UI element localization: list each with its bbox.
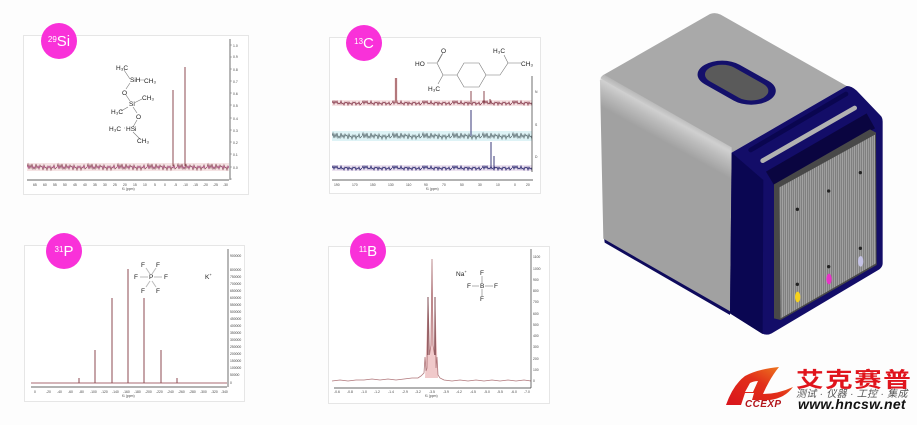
chart: 29Si NMR spectrum: 0.6 — [233, 92, 238, 96]
chart: 11B NMR spectrum: -1.4 — [388, 390, 394, 394]
tagline: 测试 · 仪器 · 工控 · 集成 — [796, 388, 909, 400]
badge: 29Si — [41, 23, 77, 59]
chart: 31P NMR spectrum: 450000 — [230, 317, 241, 321]
chart: 31P NMR spectrum: f1 (ppm) — [122, 394, 135, 398]
chart: 11B NMR spectrum: -0.6 — [334, 390, 340, 394]
chart: 31P NMR spectrum: -20 — [46, 390, 51, 394]
molecule: siloxane: O — [136, 114, 141, 121]
front left darker bevel — [730, 153, 763, 334]
molecule: siloxane: Si — [129, 101, 135, 108]
chart: 31P NMR spectrum: 100000 — [230, 366, 241, 370]
chart: 11B NMR spectrum: -7.0 — [524, 390, 530, 394]
chart: 11B NMR spectrum: 200 — [533, 357, 539, 361]
chart: 31P NMR spectrum: -100 — [90, 390, 97, 394]
chart: 11B NMR spectrum: -3.2 — [415, 390, 421, 394]
chart: 31P NMR spectrum: 900000 — [230, 254, 241, 258]
molecule: PF6: F — [141, 288, 145, 295]
chart: 31P NMR spectrum: -120 — [101, 390, 108, 394]
chart: 29Si NMR spectrum: -25 — [213, 183, 218, 187]
molecule: PF6: F — [156, 288, 160, 295]
chart: 31P NMR spectrum: 550000 — [230, 303, 241, 307]
chart: 29Si NMR spectrum: 25 — [113, 183, 117, 187]
chart: 31P NMR spectrum: -340 — [221, 390, 228, 394]
device top face — [601, 13, 847, 153]
chart: 31P NMR spectrum: 0 — [34, 390, 36, 394]
chart: 29Si NMR spectrum: 20 — [123, 183, 127, 187]
chart: 11B NMR spectrum: -5.0 — [484, 390, 490, 394]
chart: 13C NMR spectra: 110 — [406, 183, 412, 187]
chart: 11B NMR spectrum: -2.9 — [402, 390, 408, 394]
chart: 29Si NMR spectrum: -20 — [203, 183, 208, 187]
molecule: NaBF4: B — [480, 283, 484, 290]
top rim highlight — [601, 75, 732, 153]
molecule: NaBF4: F — [494, 283, 498, 290]
chart: 11B NMR spectrum: 100 — [533, 368, 539, 372]
molecule: siloxane: O — [122, 90, 127, 97]
molecule: ibuprofen: HO — [415, 61, 425, 68]
badge: 31P: 31 — [55, 245, 64, 254]
molecule: siloxane: H₃C — [116, 65, 128, 72]
chart: 13C NMR spectra: 20 — [526, 183, 530, 187]
chart: 13C NMR spectra: S — [535, 123, 538, 127]
molecule: ibuprofen: H₃C — [493, 48, 505, 55]
chart: 11B NMR spectrum: 1100 — [533, 255, 540, 259]
molecule: ibuprofen: O — [441, 48, 446, 55]
badge: 31P — [46, 233, 82, 269]
chart: 11B NMR spectrum: -6.0 — [511, 390, 517, 394]
chart: 29Si NMR spectrum: 0 — [164, 183, 166, 187]
chart: 13C NMR spectra — [332, 76, 538, 191]
molecule: PF6: + — [209, 272, 212, 277]
chart: 29Si NMR spectrum: 0.7 — [233, 80, 238, 84]
molecule: PF6: K — [205, 274, 209, 281]
chart: 11B NMR spectrum: f1 (ppm) — [425, 394, 438, 398]
chart: 31P NMR spectrum: 250000 — [230, 345, 241, 349]
ribbed front plate — [779, 135, 876, 318]
top oval vent — [687, 55, 786, 110]
chart: 11B NMR spectrum: -3.5 — [429, 390, 435, 394]
chart: 11B NMR spectrum: 600 — [533, 312, 539, 316]
chart: 13C NMR spectra: 190 — [334, 183, 340, 187]
logo wordmark: CCEXP — [745, 399, 781, 410]
chart: 11B NMR spectrum: -4.2 — [456, 390, 462, 394]
chart: 31P NMR spectrum: -60 — [68, 390, 73, 394]
chart: 31P NMR spectrum: 500000 — [230, 310, 241, 314]
chart: 13C NMR spectra: 30 — [478, 183, 482, 187]
panel: 29Si spectrum — [24, 23, 248, 194]
chart: 31P NMR spectrum: -240 — [167, 390, 174, 394]
chart: 31P NMR spectrum: 400000 — [230, 324, 241, 328]
device front navy frame — [730, 86, 883, 335]
light bar — [763, 108, 855, 161]
chart: 31P NMR spectrum: -180 — [134, 390, 141, 394]
chart: 13C NMR spectra: 130 — [388, 183, 394, 187]
chart: 31P NMR spectrum: 150000 — [230, 359, 241, 363]
molecule: siloxane: CH₃ — [137, 138, 149, 145]
dark recess — [766, 113, 875, 185]
device: NMR spectrometer — [600, 13, 883, 335]
plate holes and coloured ports — [795, 171, 863, 302]
badge: 11B — [350, 233, 386, 269]
badge: 11B: 11 — [359, 245, 368, 254]
chart: 29Si NMR spectrum: f1 (ppm) — [122, 187, 135, 191]
chart: 13C NMR spectra: 150 — [370, 183, 376, 187]
chart: 31P NMR spectrum: 50000 — [230, 373, 240, 377]
molecule: PF6: F — [156, 262, 160, 269]
molecule: PF6: F — [164, 274, 168, 281]
chart: 31P NMR spectrum: 350000 — [230, 331, 241, 335]
chart: 29Si NMR spectrum: -15 — [193, 183, 198, 187]
chart: 31P NMR spectrum: 750000 — [230, 275, 241, 279]
chart: 11B NMR spectrum: -5.5 — [497, 390, 503, 394]
logo mark — [726, 367, 793, 405]
molecule: siloxane: H₃C — [111, 109, 123, 116]
top slot — [751, 94, 846, 150]
chart: 11B NMR spectrum: 800 — [533, 289, 539, 293]
chart: 29Si NMR spectrum: 35 — [93, 183, 97, 187]
chart: 11B NMR spectrum: -0.8 — [347, 390, 353, 394]
chart: 11B NMR spectrum: -1.2 — [374, 390, 380, 394]
device bottom edge — [604, 237, 730, 315]
chart: 29Si NMR spectrum: 60 — [43, 183, 47, 187]
website: www.hncsw.net — [798, 396, 907, 412]
chart: 31P NMR spectrum: -220 — [156, 390, 163, 394]
chart: 31P NMR spectrum: 800000 — [230, 268, 241, 272]
chart: 29Si NMR spectrum: 0.9 — [233, 55, 238, 59]
chart: 31P NMR spectrum: -300 — [200, 390, 207, 394]
badge: 31P: P — [63, 243, 73, 260]
chart: 29Si NMR spectrum: 0.2 — [233, 141, 238, 145]
chart: 29Si NMR spectrum: 65 — [33, 183, 37, 187]
chart: 11B NMR spectrum: -4.5 — [470, 390, 476, 394]
molecule: siloxane — [109, 65, 156, 145]
molecule: NaBF4: F — [480, 296, 484, 303]
chart: 29Si NMR spectrum: 40 — [83, 183, 87, 187]
chart: 29Si NMR spectrum: 0.3 — [233, 129, 238, 133]
chart: 11B NMR spectrum: 0 — [533, 379, 535, 383]
chart: 13C NMR spectra: 50 — [460, 183, 464, 187]
chart: 29Si NMR spectrum: 10 — [143, 183, 147, 187]
logo: ACCEXP — [726, 367, 912, 412]
chart: 31P NMR spectrum: 600000 — [230, 296, 241, 300]
chart: 29Si NMR spectrum: 15 — [133, 183, 137, 187]
chart: 31P NMR spectrum: -80 — [79, 390, 84, 394]
chart: 31P NMR spectrum: -260 — [178, 390, 185, 394]
company name: 艾克赛普 — [796, 367, 912, 392]
panel backing — [774, 129, 877, 320]
molecule: PF6: F — [134, 274, 138, 281]
chart: 31P NMR spectrum: -320 — [211, 390, 218, 394]
molecule: NaBF4: + — [464, 269, 467, 274]
chart: 29Si NMR spectrum: 0.8 — [233, 68, 238, 72]
chart: 13C NMR spectra: D — [535, 155, 538, 159]
chart: 11B NMR spectrum: -1.0 — [361, 390, 367, 394]
molecule: PF6 — [134, 262, 212, 295]
chart: 29Si NMR spectrum: -10 — [183, 183, 188, 187]
panel: 31P spectrum — [24, 233, 244, 402]
chart: 29Si NMR spectrum: -30 — [223, 183, 228, 187]
badge: 29Si: 29 — [48, 35, 57, 44]
molecule: PF6: F — [141, 262, 145, 269]
chart: 29Si NMR spectrum: 30 — [103, 183, 107, 187]
chart: 29Si NMR spectrum: 50 — [63, 183, 67, 187]
molecule: NaBF4: F — [467, 283, 471, 290]
chart: 11B NMR spectrum: 700 — [533, 300, 539, 304]
molecule: PF6: P — [149, 274, 153, 281]
chart: 31P NMR spectrum: -200 — [145, 390, 152, 394]
chart: 11B NMR spectrum: 900 — [533, 278, 539, 282]
panel: 11B spectrum — [328, 233, 550, 404]
molecule: siloxane: CH₃ — [144, 78, 156, 85]
chart: 31P NMR spectrum: -160 — [123, 390, 130, 394]
chart: 31P NMR spectrum: 300000 — [230, 338, 241, 342]
chart: 29Si NMR spectrum: 0.4 — [233, 117, 238, 121]
chart: 13C NMR spectra: N — [535, 90, 538, 94]
chart: 31P NMR spectrum — [31, 249, 241, 398]
chart: 31P NMR spectrum: -140 — [112, 390, 119, 394]
molecule: ibuprofen — [415, 48, 533, 93]
chart: 11B NMR spectrum: 500 — [533, 323, 539, 327]
chart: 29Si NMR spectrum — [27, 39, 238, 191]
chart: 29Si NMR spectrum: 45 — [73, 183, 77, 187]
chart: 11B NMR spectrum: 1000 — [533, 267, 541, 271]
molecule: NaBF4: Na — [456, 271, 464, 278]
chart: 29Si NMR spectrum: 55 — [53, 183, 57, 187]
badge: 29Si: Si — [57, 33, 70, 50]
chart: 11B NMR spectrum: 300 — [533, 345, 539, 349]
chart: 29Si NMR spectrum: 0.1 — [233, 153, 238, 157]
molecule: ibuprofen: CH₃ — [521, 61, 533, 68]
chart: 31P NMR spectrum: 0 — [230, 381, 232, 385]
chart: 29Si NMR spectrum: 1.0 — [233, 44, 238, 48]
chart: 31P NMR spectrum: 200000 — [230, 352, 241, 356]
badge: 13C — [346, 25, 382, 61]
badge: 13C: 13 — [354, 37, 364, 46]
chart: 11B NMR spectrum: -3.9 — [443, 390, 449, 394]
molecule: siloxane: CH₃ — [142, 95, 154, 102]
molecule: NaBF4 — [456, 269, 498, 303]
molecule: NaBF4: F — [480, 270, 484, 277]
chart: 13C NMR spectra: 90 — [424, 183, 428, 187]
molecule: siloxane: SiH — [130, 77, 141, 84]
chart: 31P NMR spectrum: -40 — [57, 390, 62, 394]
badge: 13C: C — [363, 35, 374, 52]
chart: 29Si NMR spectrum: 0.5 — [233, 104, 238, 108]
chart: 11B NMR spectrum — [332, 249, 541, 398]
chart: 31P NMR spectrum: 700000 — [230, 282, 241, 286]
chart: 13C NMR spectra: 170 — [352, 183, 358, 187]
molecule: siloxane: HSi — [126, 126, 136, 133]
chart: 13C NMR spectra: 70 — [442, 183, 446, 187]
chart: 13C NMR spectra: 10 — [496, 183, 500, 187]
molecule: ibuprofen: H₃C — [428, 86, 440, 93]
panel: 13C spectrum — [330, 25, 540, 194]
molecule: siloxane: H₃C — [109, 126, 121, 133]
chart: 11B NMR spectrum: 400 — [533, 334, 539, 338]
chart: 13C NMR spectra: f1 (ppm) — [426, 187, 439, 191]
chart: 29Si NMR spectrum: -5 — [174, 183, 177, 187]
chart: 31P NMR spectrum: 650000 — [230, 289, 241, 293]
chart: 13C NMR spectra: 0 — [514, 183, 516, 187]
badge: 11B: B — [367, 243, 377, 260]
device side face — [600, 79, 732, 312]
chart: 31P NMR spectrum: -280 — [189, 390, 196, 394]
chart: 29Si NMR spectrum: 5 — [154, 183, 156, 187]
chart: 29Si NMR spectrum: 0.0 — [233, 166, 238, 170]
